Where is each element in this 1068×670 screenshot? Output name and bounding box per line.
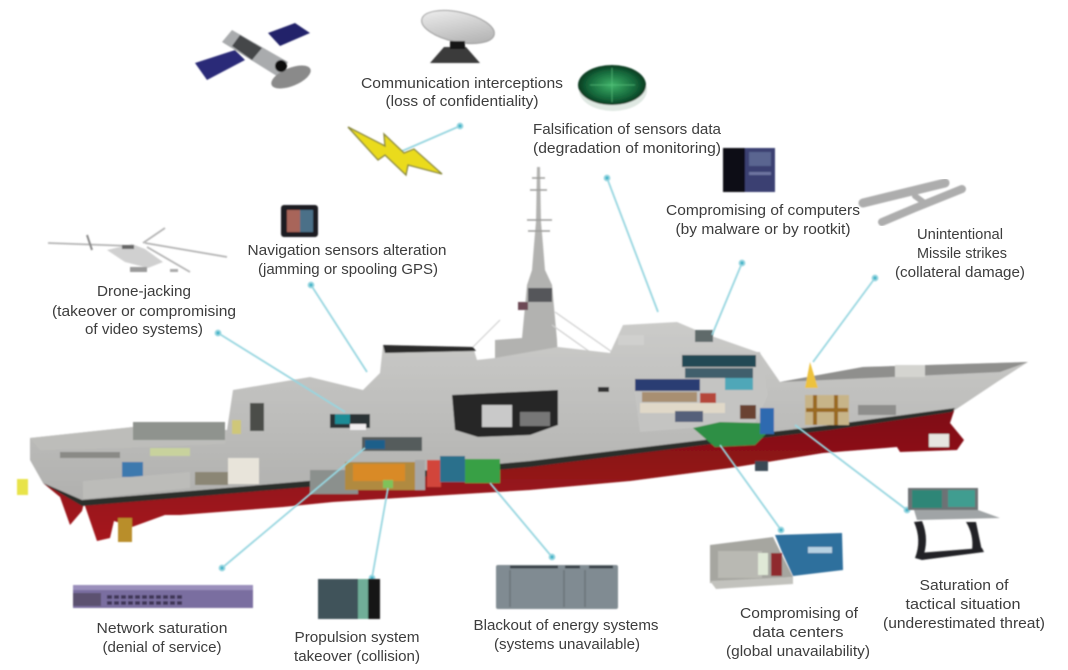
text: unintentional missile strikes: Unintentional xyxy=(917,227,1003,243)
dark waterline stripe xyxy=(43,408,955,506)
text: saturation of tactical situation: Saturation of xyxy=(920,578,1010,594)
text: communication interceptions xyxy=(361,76,563,110)
line: missile xyxy=(813,276,878,362)
line: tactical xyxy=(795,425,910,512)
text: propulsion system takeover: Propulsion system xyxy=(294,630,420,646)
text: falsification of sensors data: (degradation of monitoring) xyxy=(533,141,721,157)
text: navigation sensors alteration: Navigation sensors alteration xyxy=(248,243,446,259)
line: communication xyxy=(400,124,462,152)
bow thruster and rudder details xyxy=(17,434,949,542)
text: unintentional missile strikes: Missile strikes xyxy=(917,246,1007,262)
line: falsification xyxy=(604,176,658,312)
icon: lightning xyxy=(348,127,442,175)
text: compromising of computers xyxy=(666,203,860,238)
dark equipment room xyxy=(452,390,558,437)
icon: parabolic dish xyxy=(419,5,497,63)
forward compartments xyxy=(598,330,925,447)
text: saturation of tactical situation: tactical situation xyxy=(906,597,1020,613)
text: propulsion system takeover: takeover (collision) xyxy=(294,649,420,665)
line: navigation xyxy=(308,282,367,372)
icon: helicopter drone xyxy=(48,228,227,272)
text: network saturation: Network saturation xyxy=(96,621,228,637)
stern deck details xyxy=(60,403,264,499)
icon: energy cabinet xyxy=(496,565,618,609)
icon: missiles xyxy=(863,183,962,222)
mast and radar tower xyxy=(472,167,612,362)
text: compromising of computers: (by malware or by rootkit) xyxy=(676,222,850,238)
icon: satellite xyxy=(195,23,314,93)
text: unintentional missile strikes xyxy=(895,227,1025,281)
text: network saturation xyxy=(96,621,228,656)
red lower hull xyxy=(43,408,964,541)
text: navigation sensors alteration: (jamming or spooling GPS) xyxy=(258,262,438,278)
text: saturation of tactical situation xyxy=(883,578,1045,632)
text: communication interceptions: Communication interceptions xyxy=(361,76,563,92)
text: propulsion system takeover xyxy=(294,630,420,665)
text: drone-jacking: (takeover or compromising xyxy=(52,304,236,320)
line: computers xyxy=(712,260,744,335)
text: communication interceptions: (loss of confidentiality) xyxy=(386,94,538,110)
text: drone-jacking xyxy=(52,284,236,338)
text: compromising of computers: Compromising of computers xyxy=(666,203,860,219)
icon: network switch xyxy=(73,585,253,608)
line: propulsion xyxy=(370,488,388,580)
icon: data center container xyxy=(710,533,843,589)
text: blackout of energy systems xyxy=(474,618,658,653)
deck highlights xyxy=(30,427,227,450)
text: blackout of energy systems: (systems unavailable) xyxy=(494,637,640,653)
text: drone-jacking: of video systems) xyxy=(85,322,203,338)
line: network xyxy=(220,448,365,570)
icon: control unit xyxy=(318,579,380,619)
text: falsification of sensors data: Falsification of sensors data xyxy=(533,122,722,138)
aft compartments and machinery xyxy=(310,414,500,494)
icon: navigation display xyxy=(281,205,318,237)
text: compromising of data centers: Compromising of xyxy=(740,606,859,622)
line: data centers xyxy=(720,445,784,532)
ship cutaway xyxy=(17,167,1028,542)
text: compromising of data centers: data centers xyxy=(752,625,844,641)
grey hull and superstructure xyxy=(30,322,1028,502)
line: drone xyxy=(216,330,345,412)
icon: radar xyxy=(578,65,647,111)
connector lines xyxy=(216,124,910,580)
text: network saturation: (denial of service) xyxy=(102,640,222,656)
text: navigation sensors alteration xyxy=(248,243,446,278)
text: compromising of data centers: (global unavailability) xyxy=(726,644,870,660)
icon: tactical console xyxy=(908,488,1000,560)
icon: computer tower xyxy=(723,148,775,192)
text: saturation of tactical situation: (underestimated threat) xyxy=(883,616,1045,632)
text: drone-jacking: Drone-jacking xyxy=(97,284,191,300)
line: blackout xyxy=(490,483,554,560)
text: unintentional missile strikes: (collateral damage) xyxy=(895,265,1025,281)
text: compromising of data centers xyxy=(726,606,870,660)
text: blackout of energy systems: Blackout of energy systems xyxy=(474,618,658,634)
text: falsification of sensors data xyxy=(533,122,722,157)
